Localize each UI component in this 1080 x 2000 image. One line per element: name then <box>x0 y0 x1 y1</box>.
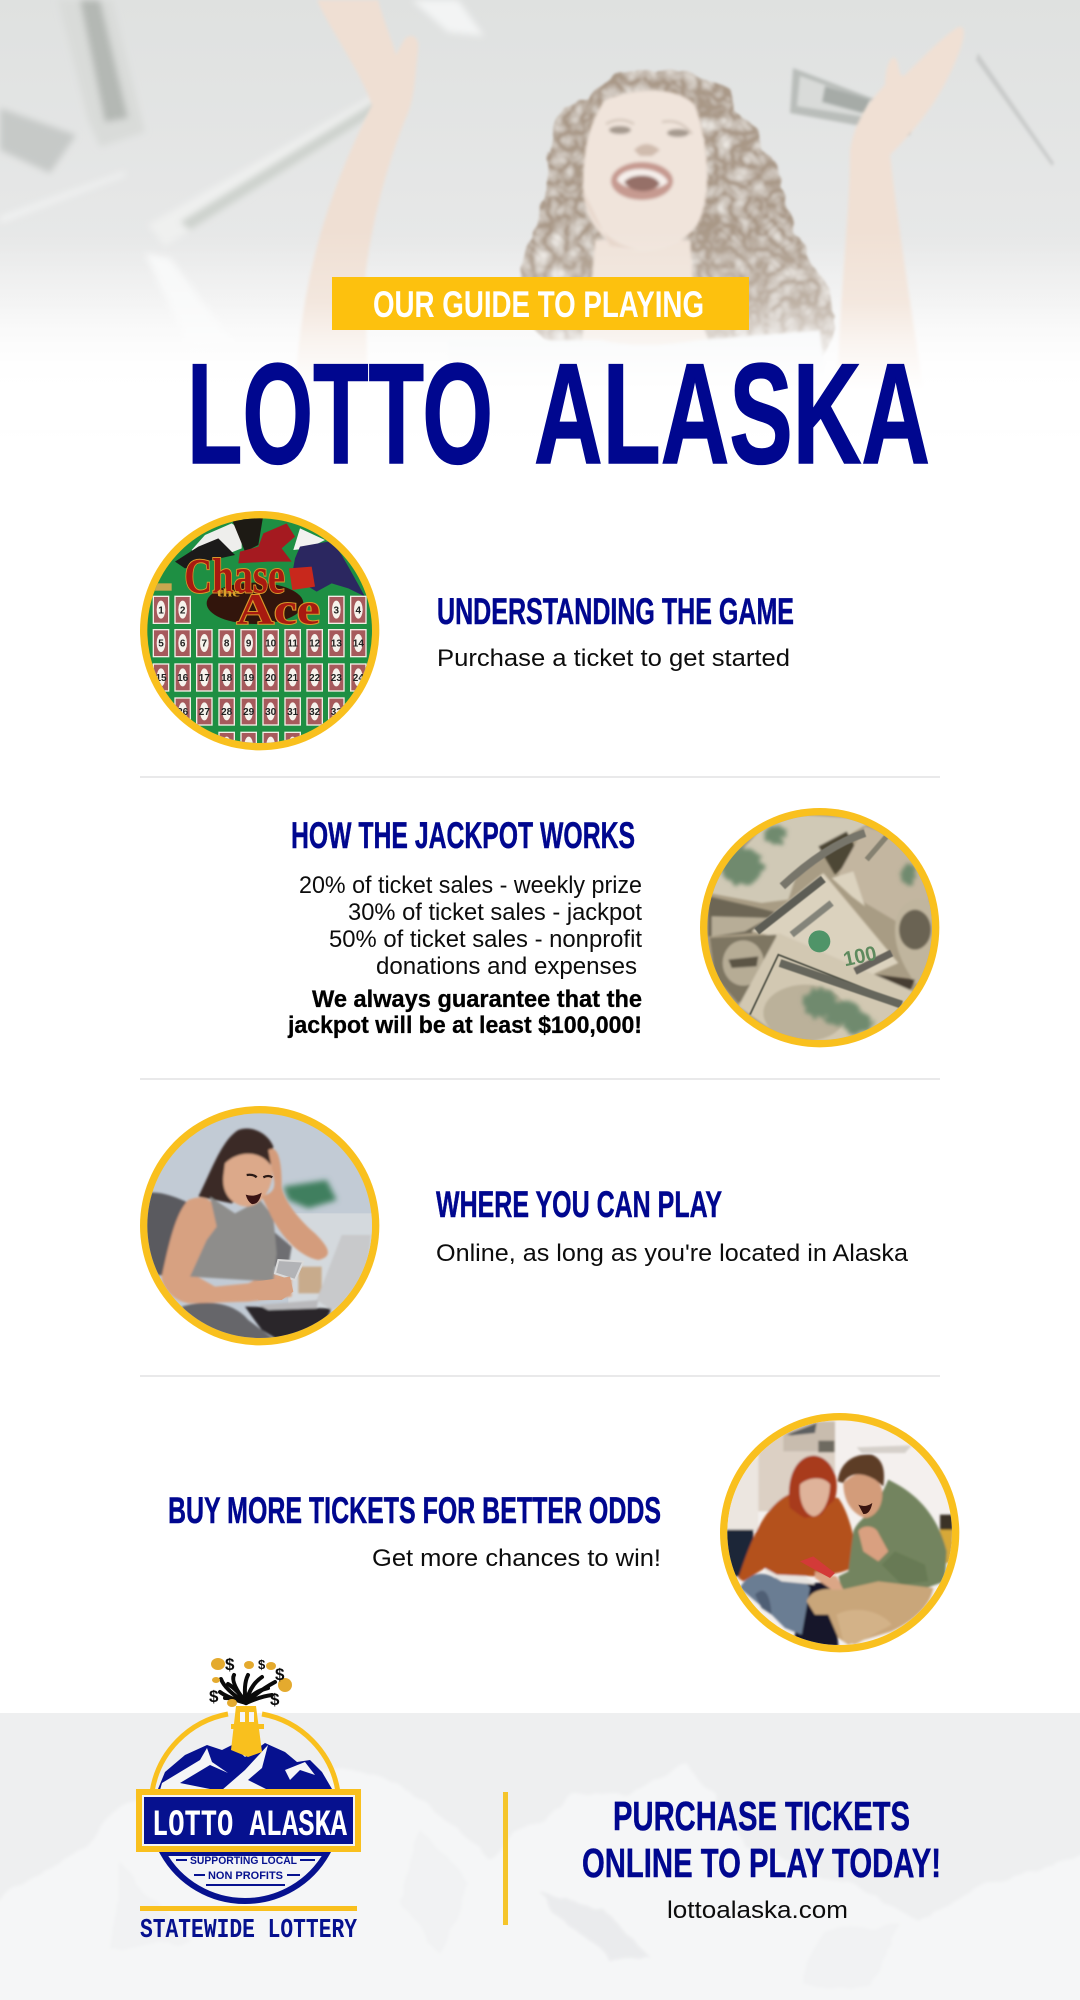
logo: gusher and coins: $ <box>258 1657 266 1672</box>
section 2 callout: guarantee: We always guarantee that the <box>312 986 642 1013</box>
banner: our guide to playing <box>332 277 749 330</box>
section 1 heading: UNDERSTANDING THE GAME <box>437 591 794 632</box>
section 1 image: Chase the Ace scratch game: 14 <box>353 639 364 650</box>
section 3 image: excited woman with phone and laptop <box>135 1100 385 1350</box>
logo: Lotto Alaska statewide lottery <box>136 1655 361 1946</box>
section 1 image: Chase the Ace scratch game: 33 <box>331 707 342 718</box>
section 1 image: Chase the Ace scratch game: 31 <box>287 707 299 718</box>
section 1 image: Chase the Ace scratch game: Chase <box>184 547 285 603</box>
section 1 image: Chase the Ace scratch game: 23 <box>331 673 342 684</box>
logo: oil derrick <box>231 1706 264 1757</box>
logo: supporting local non profits: SUPPORTING LOCAL <box>190 1855 297 1867</box>
section 1 image: Chase the Ace scratch game: 2 <box>180 605 186 616</box>
footer panel: mountain background <box>0 1713 1080 2000</box>
website address: lottoalaska.com <box>667 1897 848 1924</box>
section 1 image: Chase the Ace scratch game: 11 <box>287 639 298 650</box>
call to action heading <box>582 1793 941 1886</box>
title: Lotto Alaska: LOTTO <box>187 335 493 494</box>
logo: circle emblem with mountains <box>152 1714 338 1901</box>
logo: name plate: LOTTO ALASKA <box>152 1805 348 1847</box>
section 3 text: Online, as long as you're located in Alaska <box>436 1240 909 1267</box>
section 1 image: Chase the Ace scratch game: 16 <box>177 673 189 684</box>
section 2 text: ticket sale splits: 50% of ticket sales - nonprofit <box>329 926 642 953</box>
section 2 text: ticket sale splits: donations and expenses <box>376 953 637 980</box>
section 1 image: Chase the Ace scratch game: 10 <box>265 639 277 650</box>
call to action heading: ONLINE TO PLAY TODAY! <box>582 1840 941 1886</box>
section 1 image: Chase the Ace scratch game: 7 <box>202 639 208 650</box>
section 1 image: Chase the Ace scratch game: 24 <box>353 673 364 684</box>
section 1 image: Chase the Ace scratch game: 3 <box>334 605 340 616</box>
section 2 image: pile of hundred dollar bills <box>695 803 945 1053</box>
logo: gusher and coins: $ <box>225 1655 235 1674</box>
banner: our guide to playing: OUR GUIDE TO PLAYING <box>373 284 704 325</box>
section 1 image: Chase the Ace scratch game <box>140 511 380 750</box>
section 4 text: Get more chances to win! <box>372 1545 661 1572</box>
logo: statewide lottery: STATEWIDE LOTTERY <box>140 1916 358 1946</box>
logo: gusher and coins: $ <box>270 1690 280 1709</box>
section 1 image: Chase the Ace scratch game: 18 <box>221 673 233 684</box>
section 2 text: ticket sale splits <box>299 872 642 980</box>
section 2 callout: guarantee <box>287 986 642 1039</box>
section 1 image: Chase the Ace scratch game: 15 <box>155 673 167 684</box>
logo: gusher and coins <box>209 1655 292 1709</box>
section 1 image: Chase the Ace scratch game: 20 <box>265 673 277 684</box>
section 4 image: couple celebrating over phone <box>715 1408 965 1658</box>
hero photo: woman catching falling money <box>0 0 1080 440</box>
section 2 text: ticket sale splits: 20% of ticket sales - weekly prize <box>299 872 642 899</box>
section 1 image: Chase the Ace scratch game: 13 <box>331 639 342 650</box>
section 2 heading: HOW THE JACKPOT WORKS <box>291 815 635 856</box>
section 2 text: ticket sale splits: 30% of ticket sales - jackpot <box>348 899 642 926</box>
section 1 image: Chase the Ace scratch game: 27 <box>199 707 210 718</box>
section 2 callout: guarantee: jackpot will be at least $100,000! <box>287 1012 642 1039</box>
section 1 image: Chase the Ace scratch game: 1 <box>158 605 164 616</box>
section 1 image: Chase the Ace scratch game: Ace <box>237 586 320 634</box>
section 2 image: pile of hundred dollar bills: 100 <box>841 942 879 971</box>
section 1 image: Chase the Ace scratch game: 30 <box>265 707 277 718</box>
section 1 image: Chase the Ace scratch game: 8 <box>224 639 230 650</box>
logo: name plate <box>136 1789 361 1852</box>
section 1 image: Chase the Ace scratch game: 6 <box>180 639 186 650</box>
logo: supporting local non profits <box>176 1855 315 1885</box>
section 3 heading: WHERE YOU CAN PLAY <box>436 1184 722 1225</box>
section 1 image: Chase the Ace scratch game: 19 <box>243 673 255 684</box>
call to action heading: PURCHASE TICKETS <box>613 1793 910 1839</box>
section 1 image: Chase the Ace scratch game: 17 <box>199 673 210 684</box>
section 1 image: Chase the Ace scratch game: 28 <box>221 707 233 718</box>
section 1 text: Purchase a ticket to get started <box>437 645 790 672</box>
section 1 image: Chase the Ace scratch game: 22 <box>309 673 321 684</box>
section 1 image: Chase the Ace scratch game: 9 <box>246 639 252 650</box>
section 1 image: Chase the Ace scratch game: 21 <box>287 673 299 684</box>
title: Lotto Alaska <box>187 335 930 494</box>
section 1 image: Chase the Ace scratch game: 32 <box>309 707 321 718</box>
section 1 image: Chase the Ace scratch game: 26 <box>177 707 189 718</box>
section 1 image: Chase the Ace scratch game: 4 <box>356 605 362 616</box>
logo: statewide lottery <box>140 1906 358 1946</box>
logo: gusher and coins: $ <box>209 1687 219 1706</box>
section 1 image: Chase the Ace scratch game: 29 <box>243 707 255 718</box>
section 1 image: Chase the Ace scratch game: the <box>217 586 241 600</box>
logo: supporting local non profits: NON PROFITS <box>208 1870 283 1882</box>
section 1 image: Chase the Ace scratch game: 5 <box>158 639 164 650</box>
section 1 image: Chase the Ace scratch game: 12 <box>309 639 321 650</box>
logo: gusher and coins: $ <box>275 1665 285 1684</box>
section 4 heading: BUY MORE TICKETS FOR BETTER ODDS <box>168 1490 661 1531</box>
